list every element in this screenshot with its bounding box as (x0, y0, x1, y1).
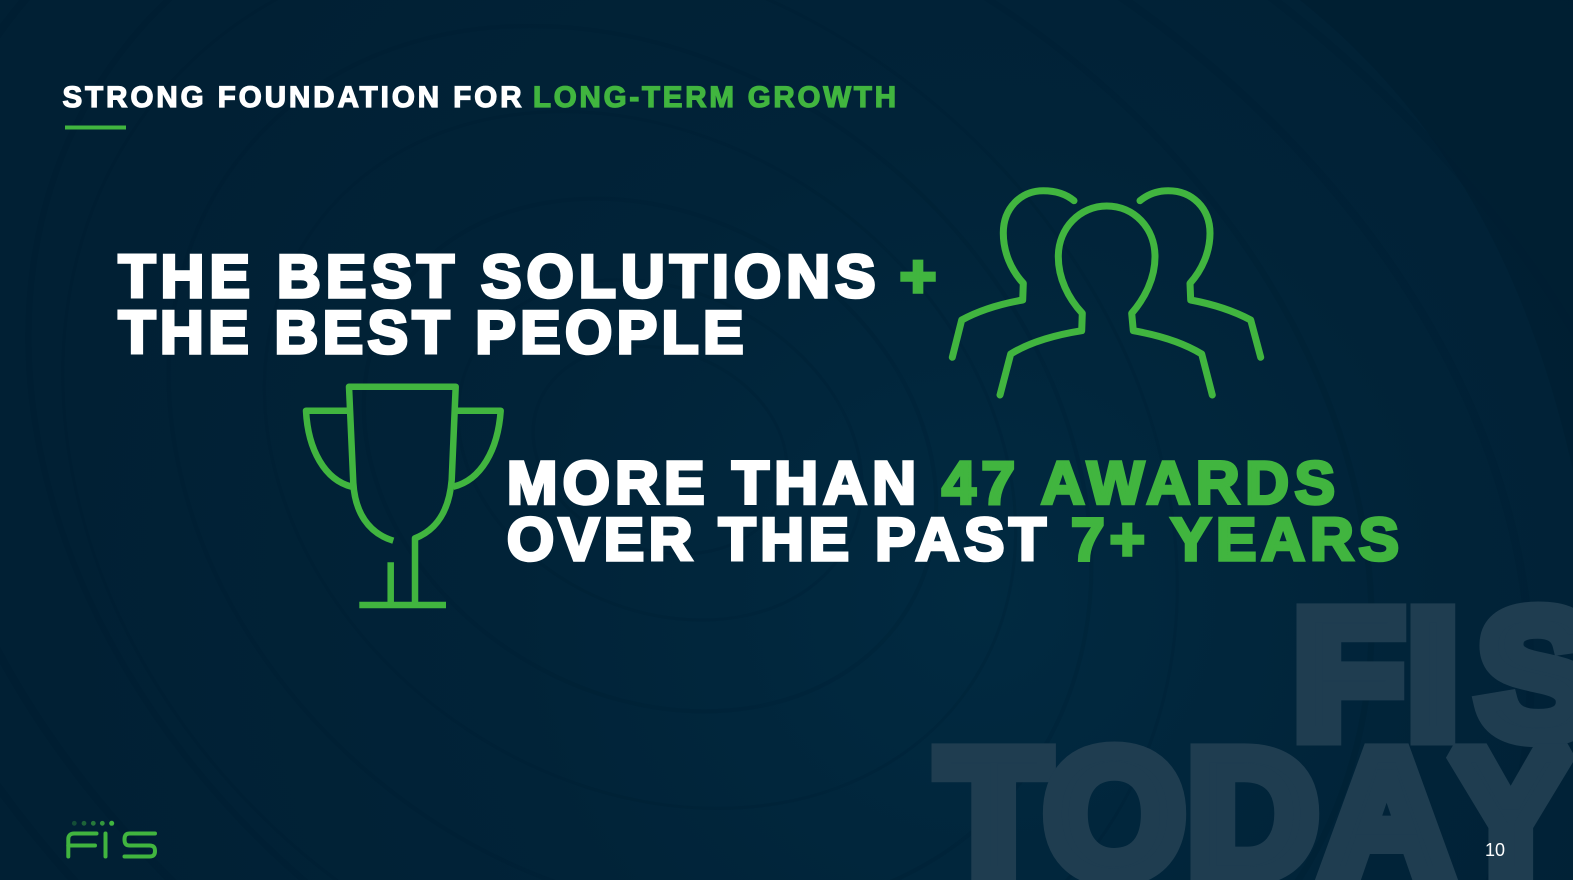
headline: the best solutions and people (118, 242, 936, 366)
headline: the best solutions and people: THE BEST SOLUTIONS (118, 242, 876, 310)
title: LONG-TERM GROWTH (533, 81, 896, 114)
icon: FIS logo (68, 821, 155, 856)
icon: trophy (306, 387, 501, 605)
icon: three people (952, 191, 1261, 395)
headline: awards: OVER THE PAST (507, 505, 1046, 573)
headline: the best solutions and people: + (900, 242, 936, 310)
title (62, 81, 896, 114)
background watermark: FIS TODAY (939, 574, 1573, 880)
page number: 10 (1485, 840, 1505, 860)
title: STRONG FOUNDATION FOR (62, 81, 522, 114)
headline: awards (507, 448, 1399, 573)
title underline (65, 126, 126, 130)
headline: awards: 47 AWARDS (942, 448, 1335, 516)
headline: awards: MORE THAN (507, 448, 916, 516)
headline: awards: 7+ YEARS (1071, 505, 1399, 573)
background panel: dark band at upper right (1300, 0, 1573, 470)
headline: the best solutions and people: THE BEST PEOPLE (118, 298, 744, 366)
